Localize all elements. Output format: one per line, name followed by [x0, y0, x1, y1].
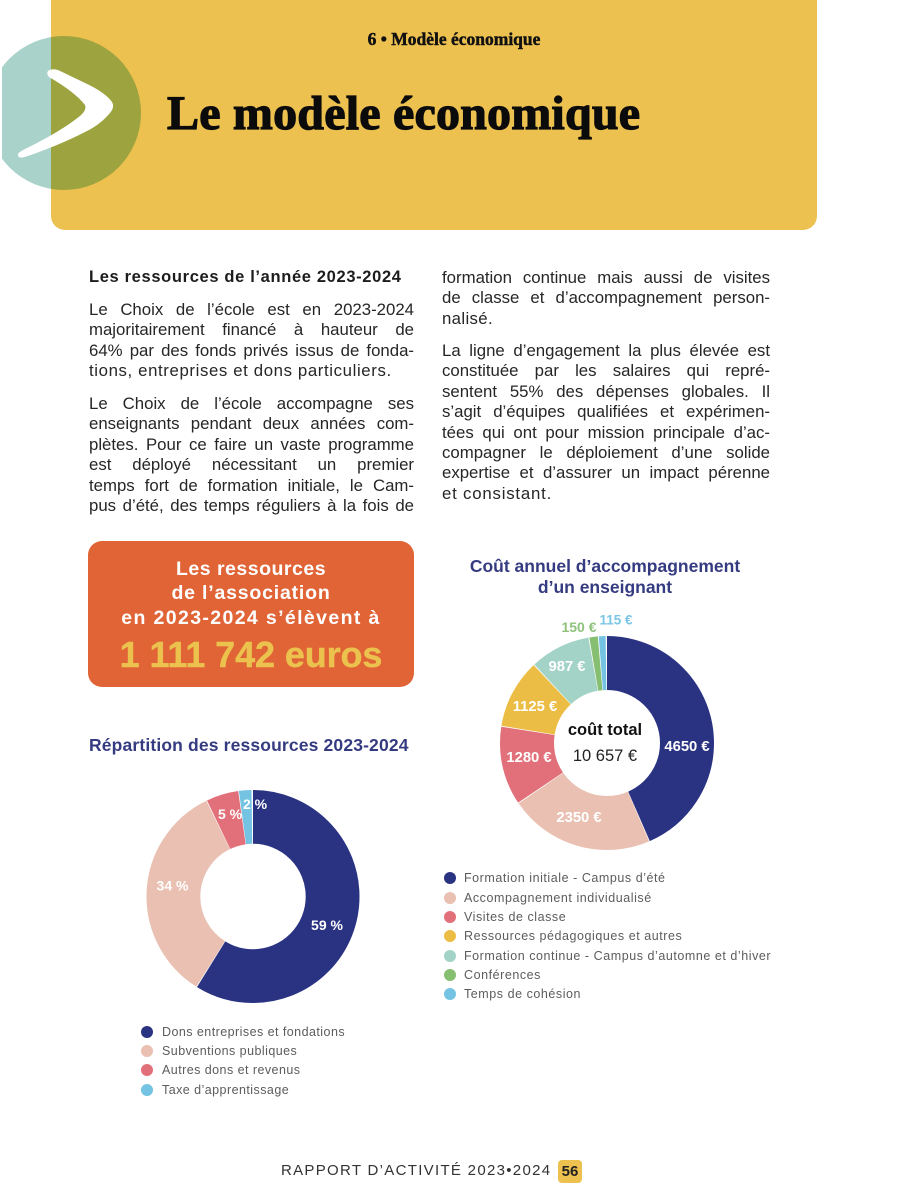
- donut chart: annual cost: 4650 €: [664, 739, 710, 755]
- text block: paragraph 2: temps fort de formation initiale, le Cam-: [89, 476, 414, 495]
- callout: total resources: 1 111 742 euros: [120, 634, 382, 675]
- text block: paragraph 2: enseignants pendant deux années com-: [89, 414, 414, 433]
- donut chart: annual cost: 1280 €: [506, 750, 552, 766]
- chart title: resources: Répartition des ressources 2023-2024: [89, 735, 409, 755]
- text block: paragraph 2: pus d’été, des temps réguliers à la fois de: [89, 496, 414, 515]
- donut chart: annual cost: 150 €: [561, 619, 597, 635]
- text block: paragraph 3: nalisé.: [442, 309, 493, 328]
- legend: resources: [141, 1025, 345, 1097]
- callout: total resources: [88, 541, 414, 687]
- text block: paragraph 4: [442, 341, 770, 503]
- chart title: cost: d’un enseignant: [538, 577, 672, 597]
- text block: paragraph 1: [89, 300, 414, 380]
- donut chart: annual cost: 1125 €: [513, 699, 557, 715]
- text block: paragraph 4: et consistant.: [442, 484, 552, 503]
- legend: resources: Subventions publiques: [162, 1044, 297, 1058]
- section label: 6 • Modèle économique: [368, 29, 540, 49]
- text block: paragraph 4: sentent 55% des dépenses globales. Il: [442, 382, 770, 401]
- donut chart: resources: 2 %: [243, 796, 268, 812]
- donut chart: annual cost: 115 €: [599, 612, 633, 628]
- legend: cost: Formation initiale - Campus d’été: [464, 871, 666, 885]
- legend: cost: Ressources pédagogiques et autres: [464, 929, 682, 943]
- legend: cost: Conférences: [464, 968, 541, 982]
- text block: paragraph 1: Le Choix de l’école est en 2023-2024: [89, 300, 414, 319]
- legend: cost: Temps de cohésion: [464, 987, 581, 1001]
- text block: paragraph 3: formation continue mais aussi de visites: [442, 268, 770, 287]
- donut chart: annual cost: 2350 €: [556, 810, 602, 826]
- legend: cost: Formation continue - Campus d’automne et d’hiver: [464, 949, 771, 963]
- legend: cost: Visites de classe: [464, 910, 566, 924]
- text block: paragraph 3: de classe et d’accompagnement person-: [442, 288, 770, 307]
- legend: resources: Taxe d’apprentissage: [162, 1083, 289, 1097]
- legend: cost: Accompagnement individualisé: [464, 891, 652, 905]
- text block: paragraph 2: est déployé nécessitant un premier: [89, 455, 414, 474]
- text block: paragraph 4: constituée par les salaires qui repré-: [442, 361, 770, 380]
- legend: resources: Dons entreprises et fondations: [162, 1025, 345, 1039]
- text block: paragraph 2: plètes. Pour ce faire un vaste programme: [89, 435, 414, 454]
- donut chart: annual cost: 987 €: [548, 659, 586, 675]
- page number badge: 56: [562, 1163, 578, 1180]
- text block: paragraph 4: s’agit d’équipes qualifiées et expérimen-: [442, 402, 770, 421]
- donut chart: resources: 5 %: [218, 806, 243, 822]
- donut chart: annual cost: [500, 612, 714, 850]
- text block: paragraph 4: compagner le déploiement d’une solide: [442, 443, 770, 462]
- text block: paragraph 1: majoritairement financé à hauteur de: [89, 320, 414, 339]
- donut chart: resources: [146, 790, 360, 1003]
- text block: paragraph 4: tées qui ont pour mission principale d’ac-: [442, 423, 770, 442]
- text block: paragraph 2: Le Choix de l’école accompagne ses: [89, 394, 414, 413]
- text block: paragraph 3: [442, 268, 770, 328]
- icon: circle with boomerang arrow: [2, 36, 141, 190]
- text block: paragraph 1: tions, entreprises et dons particuliers.: [89, 361, 392, 380]
- text block: paragraph 4: expertise et d’assurer un impact pérenne: [442, 463, 770, 482]
- legend: cost: [444, 871, 771, 1001]
- text block: paragraph 4: La ligne d’engagement la plus élevée est: [442, 341, 770, 360]
- text heading: ressources: Les ressources de l’année 2023-2024: [89, 268, 402, 286]
- callout: total resources: Les ressources: [176, 558, 326, 580]
- donut chart: annual cost: coût total: [568, 721, 642, 739]
- text block: paragraph 1: 64% par des fonds privés issus de fonda-: [89, 341, 414, 360]
- title: Le modèle économique: [167, 87, 640, 140]
- callout: total resources: en 2023-2024 s’élèvent à: [121, 607, 381, 629]
- chart title: cost: [470, 556, 740, 597]
- text block: paragraph 2: [89, 394, 414, 515]
- header panel: [51, 0, 817, 230]
- callout: total resources: de l’association: [171, 582, 331, 604]
- legend: resources: Autres dons et revenus: [162, 1063, 300, 1077]
- donut chart: annual cost: 10 657 €: [573, 747, 637, 765]
- donut chart: resources: 59 %: [311, 917, 344, 933]
- page number badge: [558, 1160, 582, 1183]
- footer text: RAPPORT D’ACTIVITÉ 2023•2024: [281, 1162, 551, 1179]
- chart title: cost: Coût annuel d’accompagnement: [470, 556, 740, 576]
- donut chart: resources: 34 %: [157, 878, 189, 894]
